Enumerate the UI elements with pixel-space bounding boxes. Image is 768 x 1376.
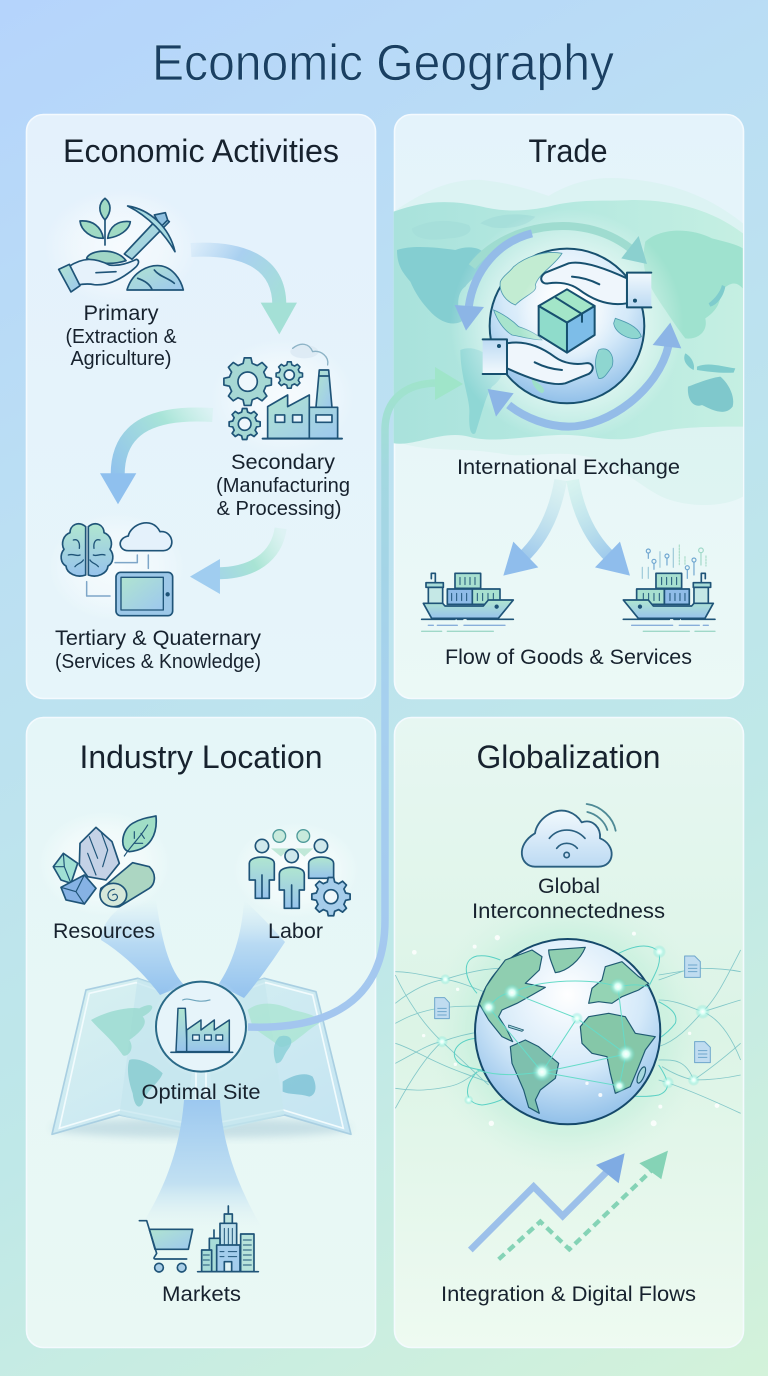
label: primary: Agriculture) bbox=[70, 348, 172, 370]
southeast asia islands and japan bbox=[684, 285, 735, 373]
label: primary bbox=[66, 301, 177, 370]
connector arrow: optimal site to trade bbox=[248, 367, 463, 1027]
label: markets: Markets bbox=[162, 1282, 241, 1306]
heading: economic activities: Economic Activities bbox=[63, 133, 339, 169]
chart/globe group: networked earth bbox=[395, 888, 741, 1259]
heading: globalization: Globalization bbox=[476, 739, 660, 775]
label: primary: (Extraction & bbox=[66, 326, 177, 348]
arrow: secondary to tertiary return bbox=[190, 528, 281, 594]
upper hand bbox=[541, 263, 651, 307]
arrow: primary to secondary bbox=[191, 250, 297, 334]
icon: cargo ship, digital services bbox=[623, 545, 715, 631]
south america bbox=[460, 348, 502, 434]
label: global interconnectedness bbox=[472, 874, 665, 923]
label: tertiary and quaternary: Tertiary & Quaternary bbox=[55, 626, 261, 650]
panel: industry location bbox=[26, 718, 376, 1348]
icon: tertiary and quaternary, brain, cloud and tablet bbox=[47, 512, 187, 622]
arctic and greenland bbox=[412, 214, 535, 240]
folded map with continents bbox=[52, 978, 351, 1134]
flow: site to markets bbox=[140, 1100, 262, 1228]
panel: trade bbox=[394, 114, 744, 698]
heading: trade: Trade bbox=[528, 133, 608, 169]
north america bbox=[397, 247, 487, 323]
glowing nodes bbox=[436, 945, 710, 1105]
arrow: secondary to tertiary bbox=[100, 414, 213, 504]
flow: labor to site bbox=[218, 900, 285, 998]
panel: globalization bbox=[394, 718, 744, 1348]
icon: city skyline bbox=[198, 1206, 258, 1272]
label: secondary: & Processing) bbox=[216, 498, 342, 520]
world map band with international exchange globe bbox=[394, 178, 743, 505]
icon: labor, people and gear bbox=[233, 822, 359, 918]
icon: secondary sector, gears and factory bbox=[211, 338, 354, 455]
map shadow bbox=[51, 1118, 351, 1138]
heading: industry location: Industry Location bbox=[80, 739, 322, 775]
shipping box bbox=[539, 289, 595, 353]
label: international exchange: International Exchange bbox=[457, 455, 680, 479]
exchange arrow: top bbox=[472, 226, 647, 267]
label: integration and digital flows: Integration & Digital Flows bbox=[441, 1282, 696, 1306]
icon: cargo ship, goods bbox=[422, 573, 513, 631]
label: tertiary and quaternary: (Services & Knowledge) bbox=[55, 651, 261, 673]
document icons bbox=[435, 956, 710, 1063]
icon: resources, crystals, leaf and log bbox=[38, 810, 171, 917]
label: secondary: (Manufacturing bbox=[216, 475, 350, 497]
australia bbox=[688, 377, 733, 412]
icon: primary sector, sprout, pick, hand and globe bbox=[44, 188, 198, 305]
label: global interconnectedness: Interconnectedness bbox=[472, 899, 665, 923]
label: optimal site: Optimal Site bbox=[142, 1080, 260, 1104]
label: resources: Resources bbox=[53, 919, 155, 943]
label: flow of goods and services: Flow of Goods & Services bbox=[445, 645, 692, 669]
network lines bbox=[395, 950, 741, 1113]
label: primary: Primary bbox=[84, 301, 159, 325]
lower hand bbox=[483, 339, 593, 384]
globe bbox=[490, 249, 644, 403]
arrows: flow to ships bbox=[503, 480, 630, 576]
central glow bbox=[450, 208, 684, 442]
network lines over globe bbox=[477, 981, 649, 1086]
title: Economic Geography bbox=[152, 34, 614, 91]
floating dots bbox=[412, 932, 719, 1126]
label: secondary bbox=[216, 450, 350, 520]
label: labor: Labor bbox=[268, 919, 323, 943]
exchange arrow: right and bottom bbox=[488, 323, 681, 427]
globe land bbox=[479, 947, 655, 1113]
icon: cloud with wifi bbox=[522, 804, 616, 867]
exchange arrow: left bbox=[455, 233, 532, 331]
label: tertiary and quaternary bbox=[55, 626, 261, 673]
panel: economic activities bbox=[26, 114, 376, 698]
label: global interconnectedness: Global bbox=[538, 874, 600, 898]
label: secondary: Secondary bbox=[231, 450, 335, 474]
eurasia bbox=[644, 231, 743, 339]
globe land bbox=[500, 252, 562, 305]
icon: optimal site factory bbox=[151, 977, 251, 1077]
orbital rings bbox=[454, 946, 676, 1105]
icon: shopping cart bbox=[139, 1221, 193, 1272]
trend arrows bbox=[470, 1151, 668, 1259]
flow: resources to site bbox=[101, 899, 184, 995]
